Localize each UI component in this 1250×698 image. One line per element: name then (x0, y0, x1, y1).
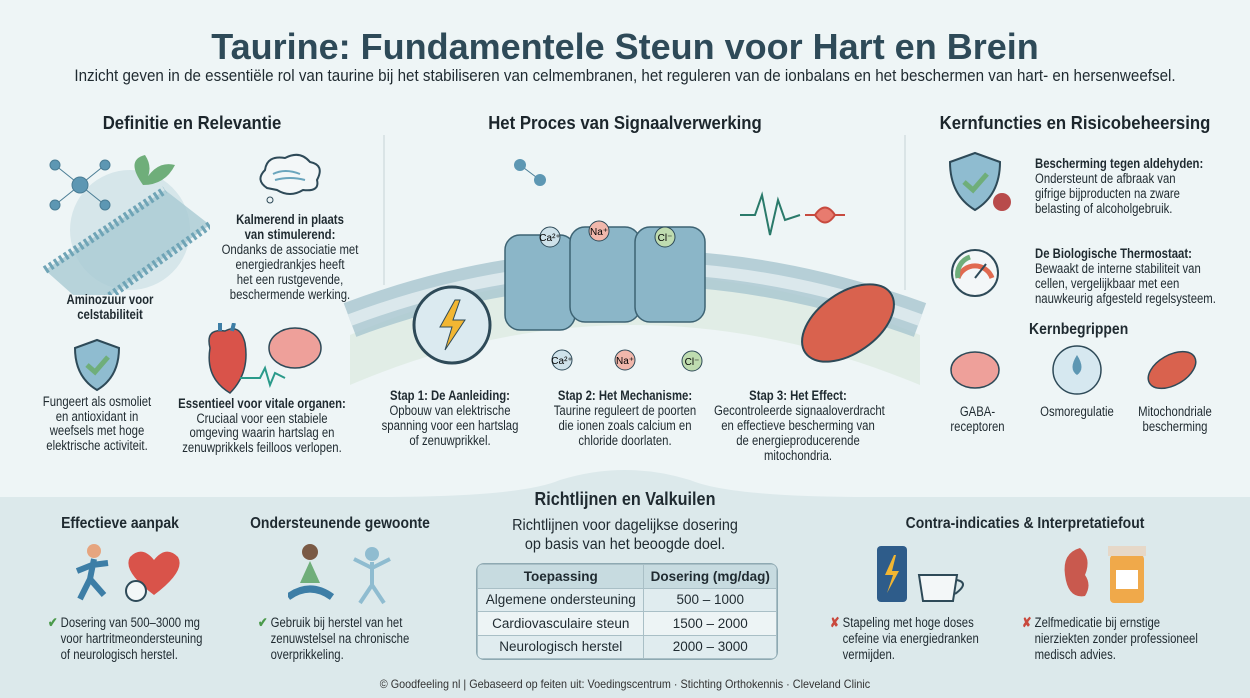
icon row: kernbegrippen (950, 345, 1197, 395)
icon: membrane (42, 155, 210, 295)
icon: heart and brain (208, 323, 322, 394)
membrane diagram (344, 159, 926, 385)
text: aldehyden: belasting of alcoholgebruik. (1035, 201, 1172, 216)
text: stap 2 (554, 388, 696, 448)
text: stap 2: die ionen zoals calcium en (558, 418, 692, 433)
text: dosering: of neurologisch herstel. (61, 647, 178, 662)
table: dosering: 500 – 1000 (676, 592, 744, 607)
heading: Het Proces van Signaalverwerking (488, 113, 762, 133)
table: dosering (476, 563, 778, 660)
text: dosering (48, 615, 202, 662)
text: intro: op basis van het beoogde doel. (525, 536, 725, 553)
icon: meditation and nerves (288, 544, 391, 604)
text: stap 3: de energieproducerende (736, 433, 860, 448)
text: aminozuur: Aminozuur voor (67, 292, 153, 307)
table: dosering: Neurologisch herstel (499, 639, 622, 654)
icon: energy drink and coffee (877, 546, 964, 602)
table: dosering: Algemene ondersteuning (486, 592, 636, 607)
text: stap 1: Stap 1: De Aanleiding: (390, 388, 510, 403)
text: thermostaat: Bewaakt de interne stabiliteit van (1035, 261, 1201, 276)
text: aminozuur: celstabiliteit (77, 307, 143, 322)
text: essentieel: zenuwprikkels feilloos verlopen. (182, 440, 342, 454)
text: stapeling: vermijden. (843, 647, 895, 662)
text: dosering: voor hartritmeondersteuning (61, 631, 202, 646)
panel: effectieve aanpak (48, 515, 202, 662)
text: stap 3: mitochondria. (764, 448, 832, 463)
text: stap 1: of zenuwprikkel. (409, 433, 491, 448)
text: mitochondriale (1138, 404, 1212, 434)
text: aldehyden: Ondersteunt de afbraak van (1035, 171, 1176, 186)
text: stap 3 (714, 388, 885, 463)
membrane diagram: Cl⁻ (658, 233, 672, 244)
text: osmoliet: en antioxidant in (56, 408, 138, 424)
icon: thought cloud (259, 154, 321, 204)
text: essentieel: Cruciaal voor een stabiele (196, 410, 328, 426)
text: mitochondriale: Mitochondriale (1138, 404, 1212, 419)
text: essentieel (178, 396, 346, 455)
text: stap 1: Opbouw van elektrische (389, 403, 511, 418)
panel: contra-indicaties (830, 515, 1198, 662)
heading: Effectieve aanpak (61, 515, 179, 532)
heading: Definitie en Relevantie (103, 113, 281, 133)
text: zelfmedicatie: ✘ Zelfmedicatie bij ernstige (1022, 615, 1160, 630)
table: dosering: Cardiovasculaire steun (492, 616, 629, 631)
text: aminozuur (66, 292, 154, 322)
title: Taurine: Fundamentele Steun voor Hart en Brein (211, 26, 1039, 67)
text: stap 1: spanning voor een hartslag (382, 418, 518, 433)
text: osmoliet: Fungeert als osmoliet (43, 394, 151, 409)
panel: definitie (42, 113, 358, 455)
text: aldehyden (1035, 156, 1203, 216)
text: osmoliet: weefsels met hoge (50, 423, 144, 438)
table: dosering: 2000 – 3000 (673, 639, 748, 654)
text: kalmerend (222, 212, 358, 302)
panel: kernfuncties (940, 113, 1216, 434)
heading: Ondersteunende gewoonte (250, 515, 430, 532)
text: zelfmedicatie: medisch advies. (1035, 647, 1116, 662)
icon: shield bug (949, 152, 1011, 212)
text: thermostaat: De Biologische Thermostaat: (1035, 246, 1192, 261)
text: thermostaat (1035, 246, 1216, 306)
text: thermostaat: cellen, vergelijkbaar met een (1035, 276, 1179, 291)
membrane diagram: Ca²⁺ (539, 233, 561, 244)
membrane diagram: Na⁺ (616, 356, 634, 367)
text: stap 3: Gecontroleerde signaaloverdracht (714, 403, 885, 418)
text: stap 2: chloride doorlaten. (578, 433, 672, 448)
text: stap 1 (382, 388, 518, 448)
text: stap 2: Stap 2: Het Mechanisme: (558, 388, 692, 403)
table: dosering: 1500 – 2000 (673, 616, 748, 631)
text: intro: Richtlijnen voor dagelijkse dosering (512, 517, 738, 534)
text: stapeling (830, 615, 979, 662)
text: gebruik (258, 615, 409, 662)
text: intro (512, 517, 738, 553)
text: aldehyden: Bescherming tegen aldehyden: (1035, 156, 1203, 171)
text: kalmerend: energiedrankjes heeft (235, 257, 345, 272)
text: stap 2: Taurine reguleert de poorten (554, 403, 696, 418)
subtitle: Inzicht geven in de essentiële rol van taurine bij het stabiliseren van celmembranen, het reguleren van de ionbalans en het beschermen van hart- en hersenweefsel. (74, 67, 1176, 85)
membrane diagram: Cl⁻ (685, 357, 699, 368)
table: dosering: Toepassing (524, 569, 598, 584)
table: dosering: Dosering (mg/dag) (651, 569, 770, 584)
icon: kidney and pills (1064, 546, 1146, 603)
heading: kernbegrippen: Kernbegrippen (1029, 321, 1128, 338)
text: osmoregulatie: Osmoregulatie (1040, 404, 1114, 419)
text: kalmerend: Kalmerend in plaats (236, 212, 344, 227)
heading: Kernfuncties en Risicobeheersing (940, 113, 1210, 133)
icon: shield (74, 338, 120, 392)
text: thermostaat: nauwkeurig afgesteld regelsysteem. (1035, 291, 1216, 306)
text: gebruik: ✔ Gebruik bij herstel van het (258, 615, 402, 630)
text: osmoliet (43, 394, 152, 452)
panel: richtlijnen (476, 489, 778, 660)
text: kalmerend: het een rustgevende, (237, 272, 343, 287)
icon: gauge (951, 249, 999, 297)
text: mitochondriale: bescherming (1143, 419, 1207, 434)
text: kalmerend: van stimulerend: (245, 227, 335, 242)
text: osmoliet: elektrische activiteit. (46, 438, 148, 452)
text: zelfmedicatie (1022, 615, 1198, 662)
heading: Richtlijnen en Valkuilen (535, 489, 715, 509)
text: dosering: ✔ Dosering van 500–3000 mg (48, 615, 200, 630)
icon: runner heart (76, 544, 180, 602)
panel: proces (344, 113, 926, 463)
text: essentieel: Essentieel voor vitale organen: (178, 396, 346, 411)
footer: © Goodfeeling nl | Gebaseerd op feiten uit: Voedingscentrum · Stichting Orthokennis · Cleveland Clinic (380, 677, 870, 691)
text: gebruik: overprikkeling. (271, 647, 344, 662)
text: gebruik: zenuwstelsel na chronische (271, 631, 409, 646)
panel: ondersteunende gewoonte (250, 515, 430, 662)
text: GABA: receptoren (950, 419, 1005, 434)
text: zelfmedicatie: nierziekten zonder professioneel (1035, 631, 1198, 646)
text: essentieel: omgeving waarin hartslag en (189, 425, 334, 440)
text: stapeling: cefeine via energiedranken (843, 631, 979, 646)
text: kalmerend: beschermende werking. (230, 287, 350, 302)
text: GABA: GABA- (960, 404, 995, 419)
membrane diagram: Ca²⁺ (551, 356, 573, 367)
text: stapeling: ✘ Stapeling met hoge doses (830, 615, 974, 630)
heading: Contra-indicaties & Interpretatiefout (906, 515, 1144, 532)
text: stap 3: Stap 3: Het Effect: (749, 388, 847, 403)
text: GABA (950, 404, 1005, 434)
text: kalmerend: Ondanks de associatie met (222, 242, 358, 257)
text: stap 3: en effectieve bescherming van (721, 418, 875, 433)
text: aldehyden: gifrige bijproducten na zware (1035, 186, 1180, 201)
membrane diagram: Na⁺ (590, 227, 608, 238)
